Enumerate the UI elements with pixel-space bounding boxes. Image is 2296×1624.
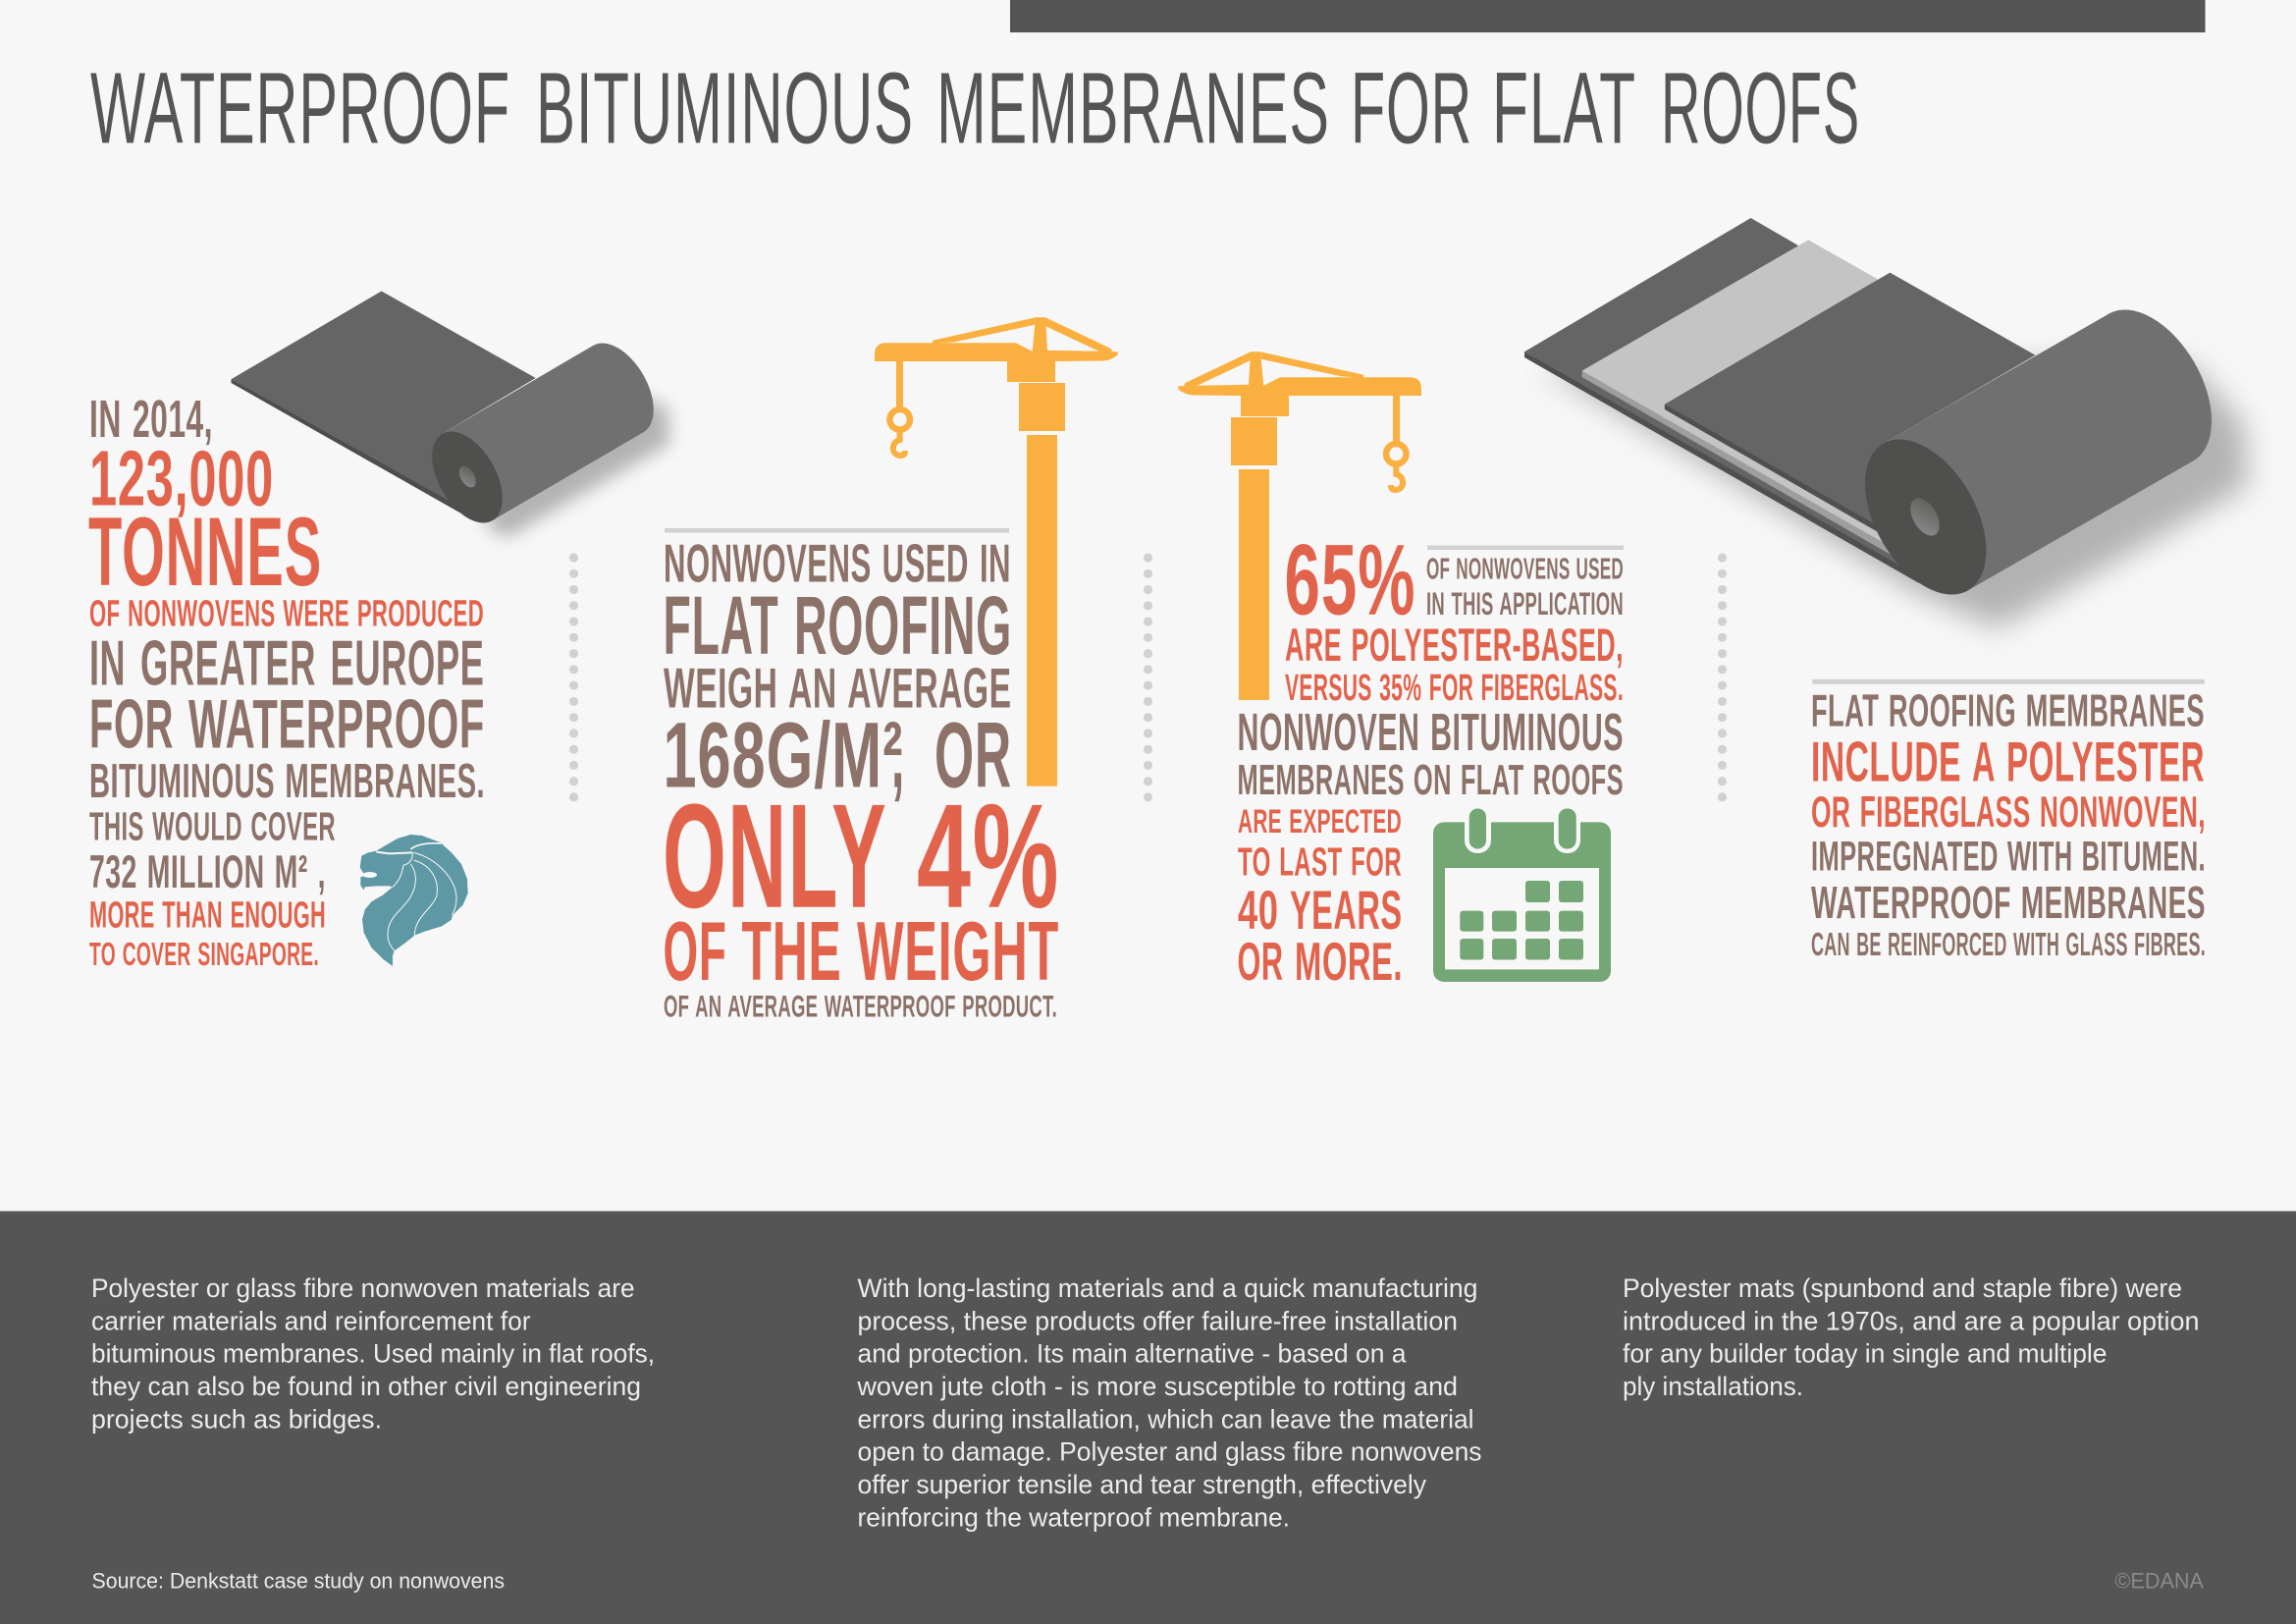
text block: polyester share and lifetime: YEARS <box>1290 879 1402 941</box>
text block: nonwovens weight: THE <box>742 904 842 999</box>
text block: 2014 production: WATERPROOF <box>188 684 485 762</box>
text block: polyester share and lifetime: 40 <box>1238 879 1278 941</box>
text block: 2014 production: BITUMINOUS MEMBRANES. <box>89 754 485 808</box>
text block: nonwovens weight: 4% <box>917 773 1060 939</box>
text block: column two: With long-lasting materials and a quick manufacturing <box>858 1273 1478 1303</box>
text block: column two: process, these products offer failure-free installation <box>858 1306 1458 1335</box>
text block: 2014 production: THIS WOULD COVER <box>89 804 336 849</box>
text block: polyester share and lifetime: ARE EXPECTED <box>1238 803 1402 840</box>
text block: column two <box>856 1273 1482 1532</box>
title: WATERPROOF <box>90 51 510 165</box>
text block: 2014 production: IN <box>89 627 126 699</box>
divider: left dotted <box>569 553 578 802</box>
text block: nonwovens weight: , <box>891 704 905 808</box>
text block: column two: offer superior tensile and tear strength, effectively <box>858 1470 1427 1499</box>
text block: nonwovens weight <box>663 528 1060 1023</box>
source note: Source: Denkstatt case study on nonwovens <box>92 1568 505 1593</box>
text block: polyester share and lifetime: OR <box>1237 931 1284 992</box>
icon: small membrane roll <box>232 291 669 538</box>
title <box>90 51 1860 165</box>
text block: 2014 production: TO COVER SINGAPORE. <box>89 936 319 973</box>
icon: large layered membrane roll <box>1524 218 2248 628</box>
text block: column two: woven jute cloth - is more susceptible to rotting and <box>856 1372 1458 1401</box>
text block: column one: projects such as bridges. <box>91 1404 382 1434</box>
divider: right dotted <box>1718 553 1727 802</box>
text block: polyester share and lifetime: TO LAST FOR <box>1238 839 1402 885</box>
text block: column three: for any builder today in single and multiple <box>1623 1339 2107 1369</box>
text block: column one: carrier materials and reinforcement for <box>91 1306 531 1335</box>
text block: polyester share and lifetime: IN THIS APPLICATION <box>1426 585 1624 622</box>
text block: 2014 production: 732 MILLION M² , <box>89 846 326 898</box>
text block: nonwovens weight: OF <box>664 904 726 999</box>
icon: Singapore merlion <box>360 835 468 966</box>
text block: nonwovens weight: OR <box>934 704 1012 808</box>
text block: column three: Polyester mats (spunbond and staple fibre) were <box>1623 1273 2182 1303</box>
text block: polyester share and lifetime: 65% <box>1284 523 1415 635</box>
text block: polyester share and lifetime: MEMBRANES ON FLAT ROOFS <box>1237 757 1624 804</box>
text block: column three: introduced in the 1970s, and are a popular option <box>1623 1306 2199 1335</box>
text block: column one: bituminous membranes. Used mainly in flat roofs, <box>91 1339 655 1369</box>
text block: membrane composition: A <box>1972 731 1996 793</box>
text block: column two: open to damage. Polyester and glass fibre nonwovens <box>858 1437 1482 1467</box>
panel: bottom explanatory band <box>0 1212 2296 1624</box>
text block: nonwovens weight: 168G/M² <box>664 704 903 808</box>
text block: 2014 production: TONNES <box>88 498 322 607</box>
text block: column one: they can also be found in other civil engineering <box>91 1372 641 1401</box>
text block: column three <box>1623 1273 2199 1401</box>
text block: 2014 production: IN 2014, <box>89 391 213 449</box>
text block: polyester share and lifetime: ARE POLYESTER-BASED, <box>1285 620 1624 672</box>
text block: nonwovens weight: WEIGH AN AVERAGE <box>664 657 1011 720</box>
text block: 2014 production: GREATER <box>140 627 316 699</box>
title: ROOFS <box>1661 51 1860 165</box>
text block: nonwovens weight: NONWOVENS USED IN <box>664 532 1011 593</box>
text block: 2014 production: MORE THAN ENOUGH <box>89 895 326 937</box>
divider: middle dotted <box>1144 553 1152 802</box>
text block: nonwovens weight: FLAT <box>664 578 779 672</box>
text block: polyester share and lifetime <box>1237 523 1624 992</box>
text block: 2014 production: 123,000 <box>89 434 274 522</box>
text block: column one <box>91 1273 655 1434</box>
title: FLAT <box>1492 51 1636 165</box>
text block: column two: and protection. Its main alternative - based on a <box>858 1339 1407 1369</box>
title: BITUMINOUS <box>536 51 914 165</box>
text block: nonwovens weight: WEIGHT <box>857 904 1059 999</box>
text block: membrane composition <box>1811 679 2206 963</box>
copyright: ©EDANA <box>2114 1568 2204 1593</box>
title: MEMBRANES <box>936 51 1330 165</box>
text block: column two: errors during installation, which can leave the material <box>858 1404 1474 1434</box>
text block: membrane composition: INCLUDE <box>1811 731 1961 793</box>
top bar <box>1010 0 2205 32</box>
text block: 2014 production: OF NONWOVENS WERE PRODUCED <box>89 593 484 635</box>
text block: polyester share and lifetime: NONWOVEN BITUMINOUS <box>1237 703 1624 762</box>
text block: 2014 production: EUROPE <box>330 627 485 699</box>
icon: crane left <box>875 317 1118 786</box>
text block: nonwovens weight: ROOFING <box>794 578 1012 672</box>
text block: polyester share and lifetime: OF NONWOVENS USED <box>1426 553 1624 585</box>
text block: polyester share and lifetime: MORE. <box>1295 931 1403 992</box>
text block: column three: ply installations. <box>1623 1372 1803 1401</box>
title: FOR <box>1351 51 1472 165</box>
text block: column one: Polyester or glass fibre nonwoven materials are <box>91 1273 635 1303</box>
text block: 2014 production: FOR <box>89 684 174 762</box>
icon: calendar <box>1433 805 1611 982</box>
icon: crane right <box>1178 352 1421 700</box>
text block: polyester share and lifetime: VERSUS 35% FOR FIBERGLASS. <box>1285 668 1624 709</box>
text block: nonwovens weight: OF AN AVERAGE WATERPROOF PRODUCT. <box>664 988 1057 1023</box>
text block: column two: reinforcing the waterproof membrane. <box>858 1502 1290 1532</box>
text block: nonwovens weight: ONLY <box>663 773 887 939</box>
text block: 2014 production <box>88 391 485 973</box>
